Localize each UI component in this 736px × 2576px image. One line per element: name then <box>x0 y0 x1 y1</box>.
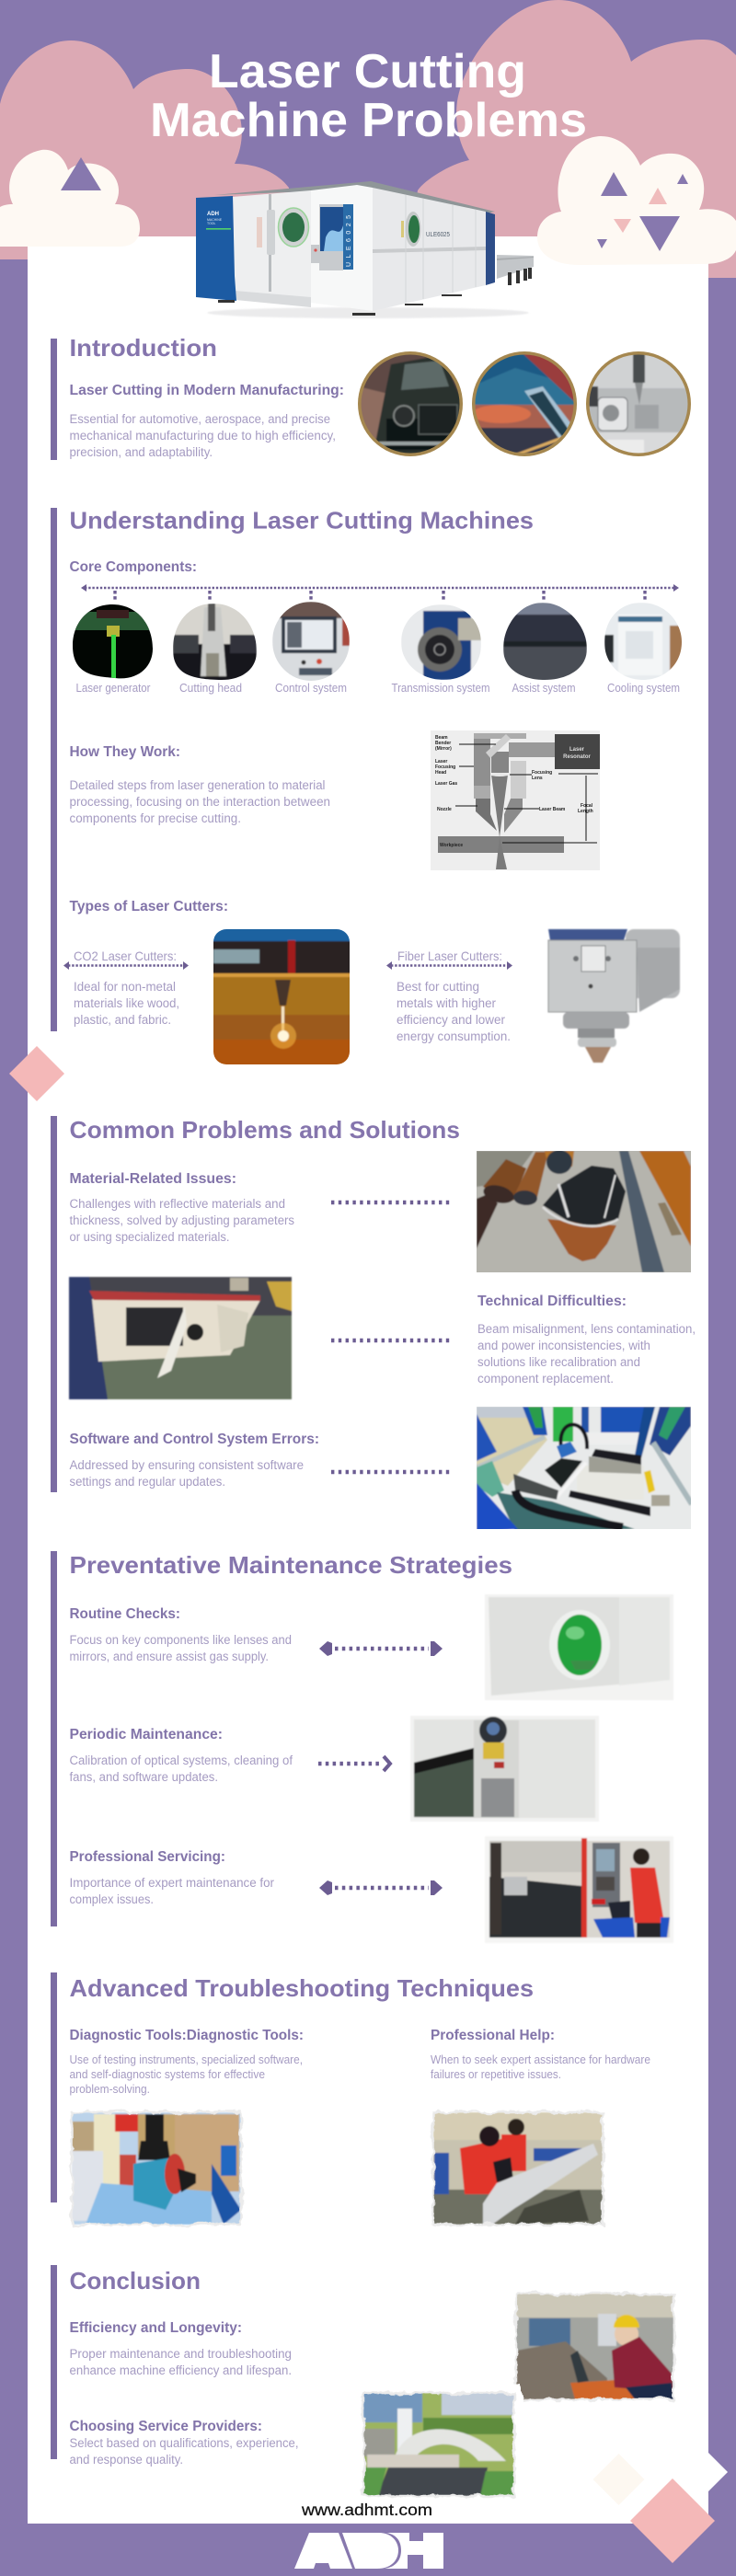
text block: professional help: When to seek expert assistance for hardware <box>431 2053 650 2066</box>
text block: choosing service providers <box>70 2436 298 2467</box>
subheading: professional servicing: Professional Servicing: <box>70 1849 225 1865</box>
title: Laser Cutting <box>209 45 526 98</box>
connector: software <box>331 1470 450 1474</box>
text block: periodic maintenance <box>70 1754 293 1784</box>
text block: diagnostic tools <box>70 2053 303 2096</box>
text block: how they work <box>70 778 330 825</box>
diagram: laser cutting head: Focal <box>581 803 593 809</box>
text block: professional servicing: Importance of expert maintenance for <box>70 1876 274 1890</box>
photo: fiber laser head <box>548 929 680 1063</box>
illustration: laser cutting machine: MACHINE <box>207 218 223 222</box>
photo: cut steel pipes <box>477 1151 691 1272</box>
labels: core components <box>75 682 680 695</box>
title <box>150 45 587 147</box>
panel: conclusion <box>51 2265 677 2500</box>
text block: fiber: energy consumption. <box>397 1029 511 1043</box>
diagram: laser cutting head: Lens <box>532 776 543 781</box>
text block: professional help: failures or repetitive issues. <box>431 2068 561 2081</box>
illustration: laser cutting machine <box>196 181 534 318</box>
text block: fiber: efficiency and lower <box>397 1013 505 1027</box>
diagram: laser cutting head: Focusing <box>435 765 455 770</box>
text block: routine checks: mirrors, and ensure assist gas supply. <box>70 1650 269 1663</box>
label: co2 laser cutters: CO2 Laser Cutters: <box>74 949 177 963</box>
text block: how they work: Detailed steps from laser generation to material <box>70 778 326 792</box>
panel: preventative maintenance strategies <box>51 1551 673 1943</box>
diagram: laser cutting head: Length <box>578 809 593 814</box>
text block: technical difficulties: and power inconsistencies, with <box>477 1339 650 1352</box>
text block: software errors: settings and regular updates. <box>70 1475 225 1489</box>
subheading: laser cutting in modern manufacturing: Laser Cutting in Modern Manufacturing: <box>70 383 344 398</box>
subheading: types of laser cutters: Types of Laser Cutters: <box>70 899 228 914</box>
subheading: technical difficulties: Technical Difficulties: <box>477 1294 627 1309</box>
text block: choosing service providers: and response quality. <box>70 2453 183 2467</box>
text block: software errors: Addressed by ensuring consistent software <box>70 1458 304 1472</box>
heading: preventative maintenance: Preventative Maintenance Strategies <box>70 1551 512 1579</box>
text block: choosing service providers: Select based on qualifications, experience, <box>70 2436 298 2450</box>
right cream cloud with triangles <box>537 136 736 265</box>
photo: aircraft boarding <box>472 351 578 457</box>
decorative pink clouds <box>0 0 736 278</box>
text block: diagnostic tools: Use of testing instruments, specialized software, <box>70 2053 303 2066</box>
text block: how they work: processing, focusing on the interaction between <box>70 795 330 809</box>
heading: advanced troubleshooting: Advanced Troubleshooting Techniques <box>70 1974 534 2002</box>
text block: material issues <box>70 1197 294 1244</box>
labels: core components: Assist system <box>512 682 576 695</box>
photo: two technicians <box>430 2109 606 2228</box>
text block: professional servicing: complex issues. <box>70 1892 154 1906</box>
text block: routine checks <box>70 1633 292 1663</box>
text block: software errors <box>70 1458 304 1489</box>
text block: material issues: thickness, solved by adjusting parameters <box>70 1213 294 1227</box>
subheading: software errors: Software and Control System Errors: <box>70 1432 319 1447</box>
text block: diagnostic tools: and self-diagnostic systems for effective <box>70 2068 265 2081</box>
diagram: laser cutting head: Bender <box>435 741 451 746</box>
connector: cabinet <box>331 1339 450 1342</box>
panel: understanding laser cutting machines <box>51 506 683 1069</box>
diagram: laser cutting head: (Mirror) <box>435 746 452 752</box>
diagram: laser cutting head: Laser Gas <box>435 781 457 787</box>
text block: routine checks: Focus on key components like lenses and <box>70 1633 292 1647</box>
icon: transmission system <box>401 604 481 680</box>
diagram: laser cutting head: Head <box>435 770 446 776</box>
photo: engineer with laptop <box>512 2290 677 2403</box>
heading: conclusion: Conclusion <box>70 2267 201 2294</box>
text block: technical difficulties: component replacement. <box>477 1372 614 1386</box>
text block: technical difficulties: Beam misalignment, lens contamination, <box>477 1322 696 1336</box>
photo: green viewing window <box>485 1594 673 1700</box>
diagram: laser cutting head: Nozzle <box>437 807 452 812</box>
text block: technical difficulties <box>477 1322 696 1386</box>
heading: common problems: Common Problems and Solutions <box>70 1116 460 1144</box>
website url: www.adhmt.com <box>301 2501 432 2519</box>
arrow: professional double <box>319 1880 443 1895</box>
illustration: laser cutting machine: ADH <box>207 212 219 217</box>
text block: efficiency: enhance machine efficiency and lifespan. <box>70 2363 292 2377</box>
text block: co2: Ideal for non-metal <box>74 980 176 994</box>
text block: efficiency <box>70 2347 292 2377</box>
arrow: routine double <box>319 1641 443 1656</box>
logo: ADH <box>294 2533 443 2569</box>
arrow: periodic right <box>318 1756 390 1771</box>
labels: core components: Laser generator <box>75 682 151 695</box>
text block: intro description: Essential for automotive, aerospace, and precise <box>70 412 330 426</box>
photo: technician in red at machine <box>485 1836 673 1943</box>
diagram: laser cutting head: Laser <box>435 759 447 765</box>
heading: introduction: Introduction <box>70 334 217 362</box>
icon: cutting head <box>173 604 257 681</box>
labels: core components: Control system <box>275 682 347 695</box>
labels: core components: Transmission system <box>392 682 489 695</box>
photo: co2 laser cutting <box>213 929 350 1064</box>
icon: laser generator <box>73 604 153 681</box>
photo: laser machine bed <box>477 1407 691 1529</box>
text block: how they work: components for precise cutting. <box>70 811 241 825</box>
subheading: core components: Core Components: <box>70 559 197 575</box>
text block: professional servicing <box>70 1876 274 1906</box>
panel: introduction <box>51 334 344 460</box>
diagram: laser cutting head: Workpiece <box>440 843 463 848</box>
arrow: fiber <box>386 961 512 970</box>
connector: material <box>331 1201 450 1204</box>
illustration: laser cutting machine: ULE6025 <box>426 232 450 238</box>
text block: periodic maintenance: fans, and software updates. <box>70 1770 218 1784</box>
text block: intro description: mechanical manufacturing due to high efficiency, <box>70 429 336 443</box>
text block: periodic maintenance: Calibration of optical systems, cleaning of <box>70 1754 293 1767</box>
photo: cooling unit <box>410 1716 599 1822</box>
subheading: professional help: Professional Help: <box>431 2028 555 2043</box>
diagram: laser cutting head: Laser Beam <box>539 807 566 812</box>
photo: extraction fan <box>68 2109 245 2228</box>
subheading: choosing service providers: Choosing Service Providers: <box>70 2419 262 2434</box>
diagram: laser cutting head: Beam <box>435 735 448 741</box>
text block: material issues: Challenges with reflective materials and <box>70 1197 285 1211</box>
illustration: laser cutting machine: TOOL <box>207 222 216 225</box>
subheading: material-related issues: Material-Related Issues: <box>70 1171 236 1187</box>
subheading: routine checks: Routine Checks: <box>70 1606 180 1622</box>
subheading: how they work: How They Work: <box>70 744 180 760</box>
decorative diamonds <box>592 2430 728 2563</box>
text block: fiber: metals with higher <box>397 996 496 1010</box>
text block: technical difficulties: solutions like recalibration and <box>477 1355 640 1369</box>
text block: material issues: or using specialized materials. <box>70 1230 230 1244</box>
photo: cnc machining <box>586 351 692 458</box>
panel: common problems and solutions <box>51 1116 699 1536</box>
subheading: diagnostic tools: Diagnostic Tools:Diagnostic Tools: <box>70 2028 304 2043</box>
left cream cloud with triangle <box>0 150 140 247</box>
text block: professional help <box>431 2053 650 2081</box>
arrow: core component timeline <box>81 584 679 601</box>
heading: understanding: Understanding Laser Cutting Machines <box>70 506 534 534</box>
panel: advanced troubleshooting techniques <box>51 1972 650 2228</box>
title: Machine Problems <box>150 94 587 147</box>
text block: intro description <box>70 412 336 459</box>
icon: cooling system <box>604 603 683 681</box>
text block: fiber: Best for cutting <box>397 980 479 994</box>
photo: classic car <box>358 351 464 457</box>
labels: core components: Cutting head <box>179 682 242 695</box>
subheading: efficiency and longevity: Efficiency and Longevity: <box>70 2320 242 2336</box>
photo: open electrical cabinet <box>69 1277 292 1399</box>
labels: core components: Cooling system <box>607 682 680 695</box>
text block: efficiency: Proper maintenance and troubleshooting <box>70 2347 292 2361</box>
text block: co2 <box>74 980 179 1027</box>
diagram: laser cutting head: Laser <box>569 747 585 753</box>
text block: diagnostic tools: problem-solving. <box>70 2083 150 2096</box>
text block: intro description: precision, and adaptability. <box>70 445 213 459</box>
text block: fiber <box>397 980 511 1043</box>
label: fiber laser cutters: Fiber Laser Cutters: <box>397 949 502 963</box>
subheading: periodic maintenance: Periodic Maintenance: <box>70 1727 223 1742</box>
text block: co2: materials like wood, <box>74 996 179 1010</box>
diagram: laser cutting head: Focusing <box>532 770 552 776</box>
photo: factory building <box>360 2389 518 2500</box>
icon: assist system <box>503 603 587 681</box>
diagram: laser cutting head <box>431 730 600 870</box>
icon: control system <box>272 602 350 682</box>
diagram: laser cutting head: Resonator <box>563 754 592 760</box>
illustration: laser cutting machine: ULE6025 <box>346 215 352 267</box>
decorative pink diamond left <box>9 1046 64 1101</box>
text block: co2: plastic, and fabric. <box>74 1013 171 1027</box>
arrow: co2 <box>63 961 189 970</box>
